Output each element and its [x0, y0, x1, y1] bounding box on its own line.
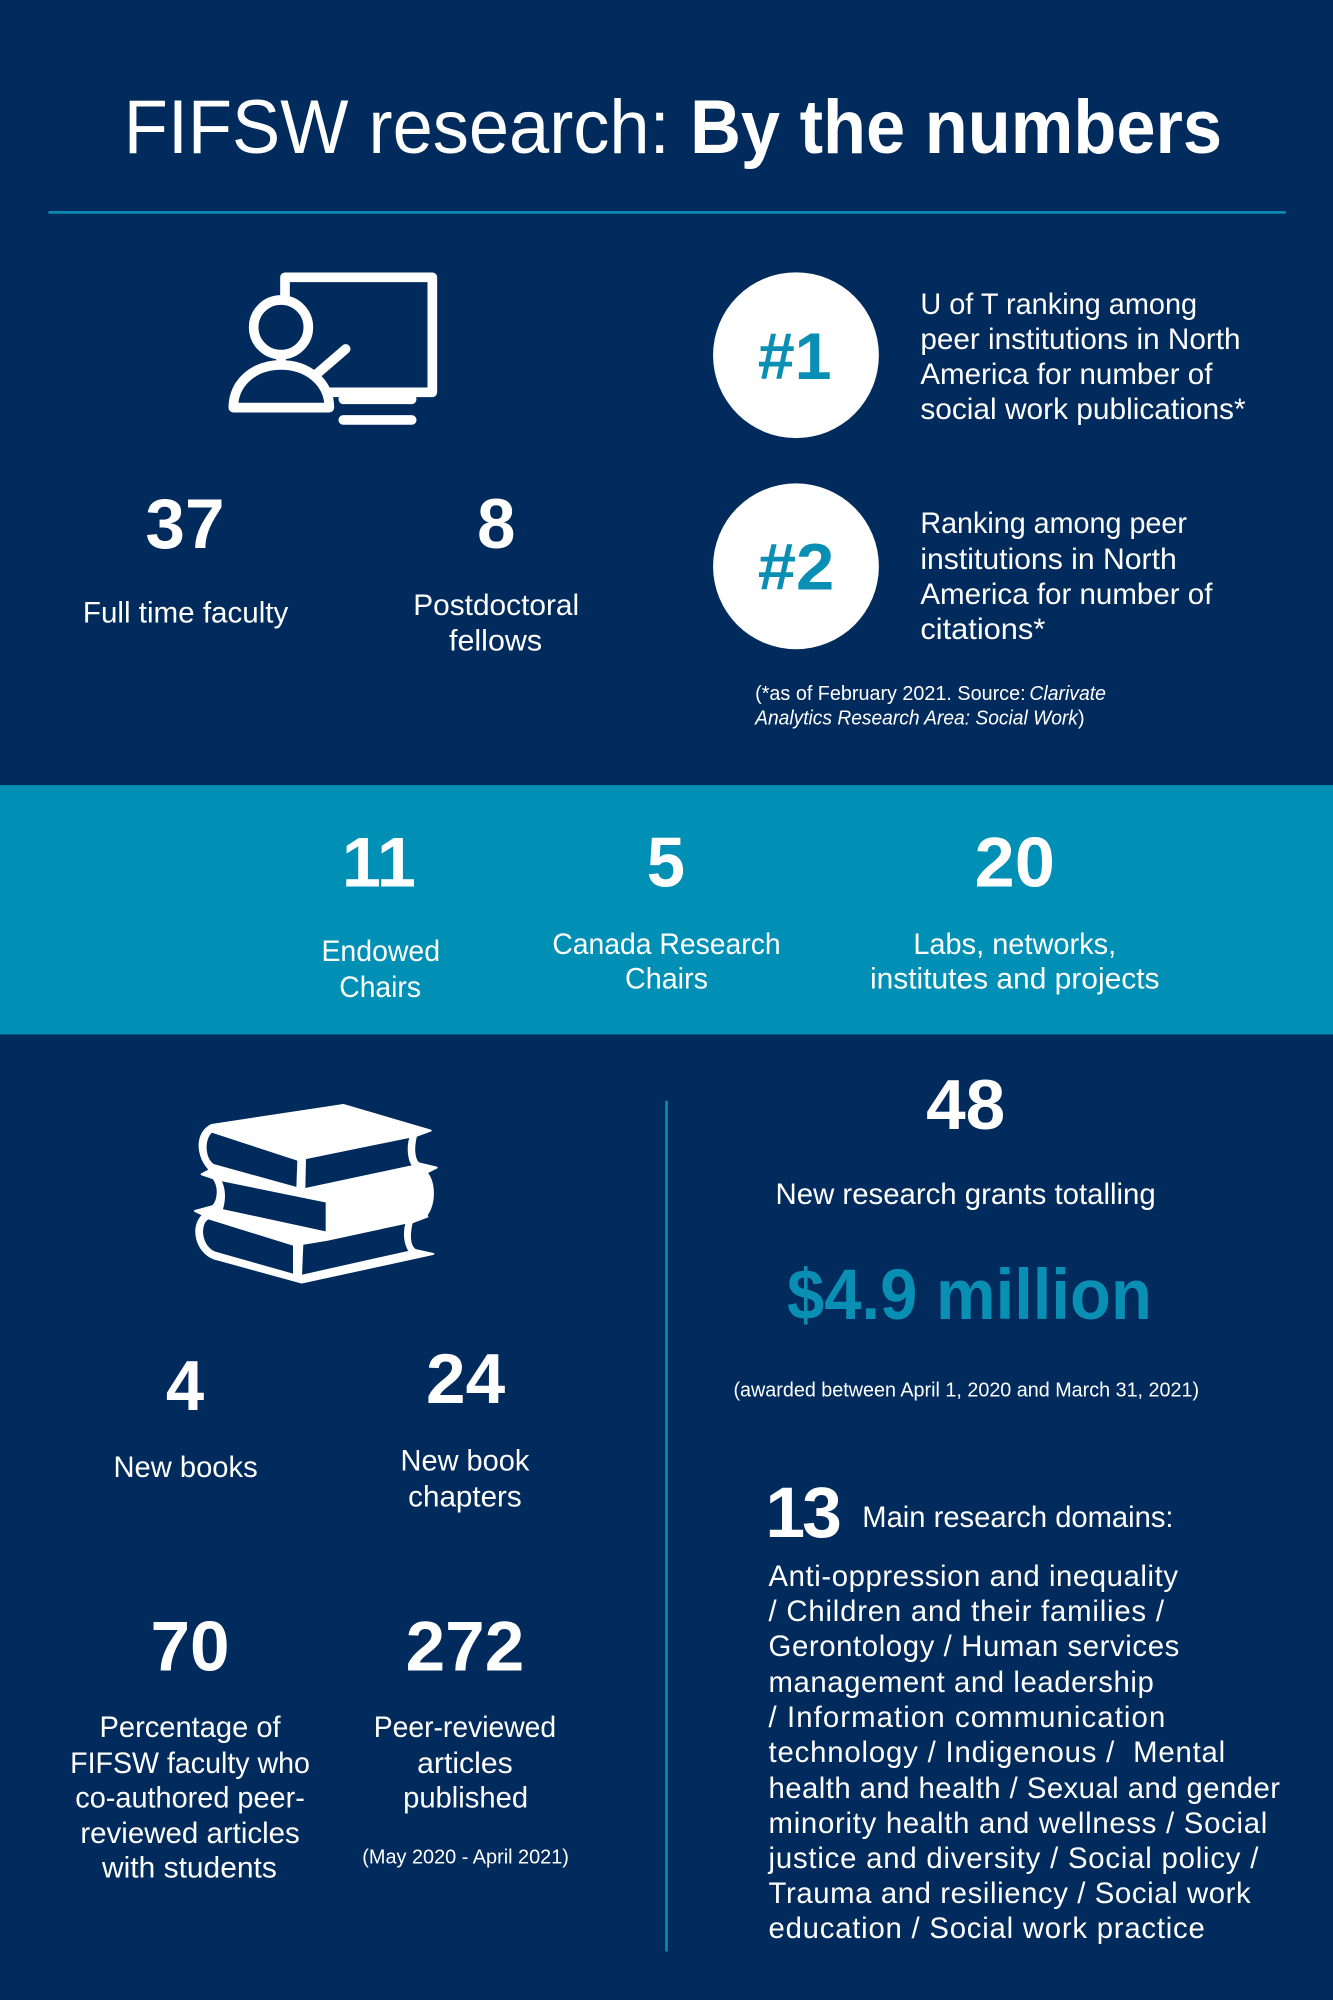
- stat: endowed chairs: 11: [342, 822, 416, 901]
- stat: canada research chairs: 5: [647, 822, 685, 901]
- stat: peer-reviewed articles: Peer-reviewed: [374, 1711, 556, 1744]
- footnote: source: Analytics Research Area: Social Work: [754, 707, 1080, 729]
- icon: stack of books: [195, 1105, 437, 1283]
- footnote: source: Clarivate: [1029, 683, 1106, 705]
- stat: new books: [114, 1346, 258, 1484]
- text: research domains list: justice and diversity / Social policy /: [768, 1842, 1259, 1875]
- text: citations ranking: institutions in North: [920, 543, 1177, 576]
- title: [124, 85, 1222, 170]
- stat: full time faculty: 37: [145, 484, 225, 563]
- stat: peer-reviewed articles: (May 2020 - April 2021): [362, 1847, 569, 1869]
- text: citations ranking: Ranking among peer: [920, 507, 1187, 540]
- stat: new research grants: [733, 1065, 1199, 1402]
- text: research domains list: / Information communication: [769, 1701, 1165, 1734]
- stat: new research grants: 48: [926, 1065, 1005, 1144]
- text: research domains list: technology / Indigenous / Mental: [769, 1736, 1225, 1769]
- stat: peer-reviewed articles: [362, 1606, 569, 1869]
- footnote: source: (*as of February 2021. Source:: [755, 683, 1026, 705]
- title: By the numbers: [690, 85, 1222, 170]
- text: research domains list: management and leadership: [769, 1666, 1154, 1699]
- stat: new book chapters: chapters: [408, 1480, 522, 1513]
- panel: chairs and labs band: [0, 785, 1333, 1034]
- stat: full time faculty: Full time faculty: [83, 596, 289, 629]
- stat: percentage co-authored with students: [70, 1606, 310, 1885]
- stat: postdoctoral fellows: 8: [477, 484, 515, 563]
- stat: new books: 4: [166, 1346, 204, 1425]
- text: research domains list: Trauma and resiliency / Social work: [769, 1877, 1251, 1910]
- stat: canada research chairs: Canada Research: [552, 928, 781, 961]
- footnote: source: ): [1078, 707, 1085, 729]
- stat: postdoctoral fellows: fellows: [449, 625, 542, 658]
- text: citations ranking: America for number of: [920, 578, 1213, 611]
- stat: labs, networks, institutes and projects: Labs, networks,: [913, 928, 1116, 961]
- stat: new research grants: (awarded between April 1, 2020 and March 31, 2021): [733, 1380, 1199, 1402]
- stat: labs, networks, institutes and projects: institutes and projects: [870, 963, 1160, 996]
- heading: main research domains: [765, 1473, 1174, 1553]
- stat: canada research chairs: Chairs: [625, 963, 708, 996]
- stat: new book chapters: 24: [426, 1339, 505, 1418]
- stat: new research grants: $4.9 million: [787, 1255, 1152, 1335]
- text: citations ranking: [920, 507, 1213, 646]
- stat: percentage co-authored with students: Percentage of: [99, 1711, 281, 1744]
- text: research domains list: Anti-oppression and inequality: [769, 1560, 1178, 1593]
- stat: peer-reviewed articles: published: [403, 1781, 528, 1814]
- stat: new book chapters: New book: [401, 1445, 530, 1478]
- badge: #2: [713, 483, 879, 649]
- text: research domains list: Gerontology / Human services: [769, 1630, 1179, 1663]
- text: publications ranking: America for number of: [920, 358, 1213, 391]
- text: publications ranking: social work publications*: [920, 393, 1246, 426]
- stat: postdoctoral fellows: [413, 484, 579, 658]
- text: research domains list: education / Social work practice: [769, 1912, 1205, 1945]
- text: research domains list: [768, 1560, 1280, 1945]
- badge: #1: [713, 272, 879, 438]
- stat: new book chapters: [401, 1339, 530, 1513]
- stat: labs, networks, institutes and projects: [870, 822, 1160, 996]
- text: research domains list: health and health / Sexual and gender: [769, 1772, 1280, 1805]
- icon: teacher at screen: [233, 277, 432, 420]
- text: research domains list: / Children and their families /: [769, 1595, 1165, 1628]
- stat: percentage co-authored with students: co-authored peer-: [75, 1781, 305, 1814]
- badge: #2: #2: [758, 530, 834, 604]
- text: publications ranking: [920, 288, 1246, 426]
- stat: endowed chairs: Chairs: [339, 971, 421, 1004]
- stat: full time faculty: [83, 484, 289, 629]
- stat: peer-reviewed articles: articles: [417, 1747, 513, 1780]
- title: FIFSW research:: [124, 85, 670, 170]
- heading: main research domains: 13: [765, 1473, 842, 1553]
- stat: new books: New books: [114, 1451, 258, 1484]
- stat: endowed chairs: Endowed: [321, 935, 440, 968]
- stat: labs, networks, institutes and projects: 20: [975, 822, 1055, 901]
- stat: percentage co-authored with students: 70: [151, 1606, 230, 1685]
- stat: peer-reviewed articles: 272: [406, 1606, 524, 1685]
- heading: main research domains: Main research domains:: [862, 1501, 1174, 1534]
- stat: new research grants: New research grants totalling: [776, 1178, 1156, 1211]
- text: publications ranking: U of T ranking among: [920, 288, 1197, 321]
- stat: canada research chairs: [552, 822, 781, 996]
- badge: #1: #1: [758, 320, 832, 394]
- stat: percentage co-authored with students: reviewed articles: [80, 1817, 300, 1850]
- stat: percentage co-authored with students: with students: [101, 1852, 277, 1885]
- stat: percentage co-authored with students: FIFSW faculty who: [70, 1747, 310, 1780]
- stat: postdoctoral fellows: Postdoctoral: [413, 589, 579, 622]
- footnote: source: [754, 683, 1106, 729]
- stat: endowed chairs: [321, 822, 440, 1004]
- text: research domains list: minority health and wellness / Social: [769, 1807, 1267, 1840]
- text: publications ranking: peer institutions in North: [920, 323, 1241, 356]
- text: citations ranking: citations*: [920, 613, 1045, 646]
